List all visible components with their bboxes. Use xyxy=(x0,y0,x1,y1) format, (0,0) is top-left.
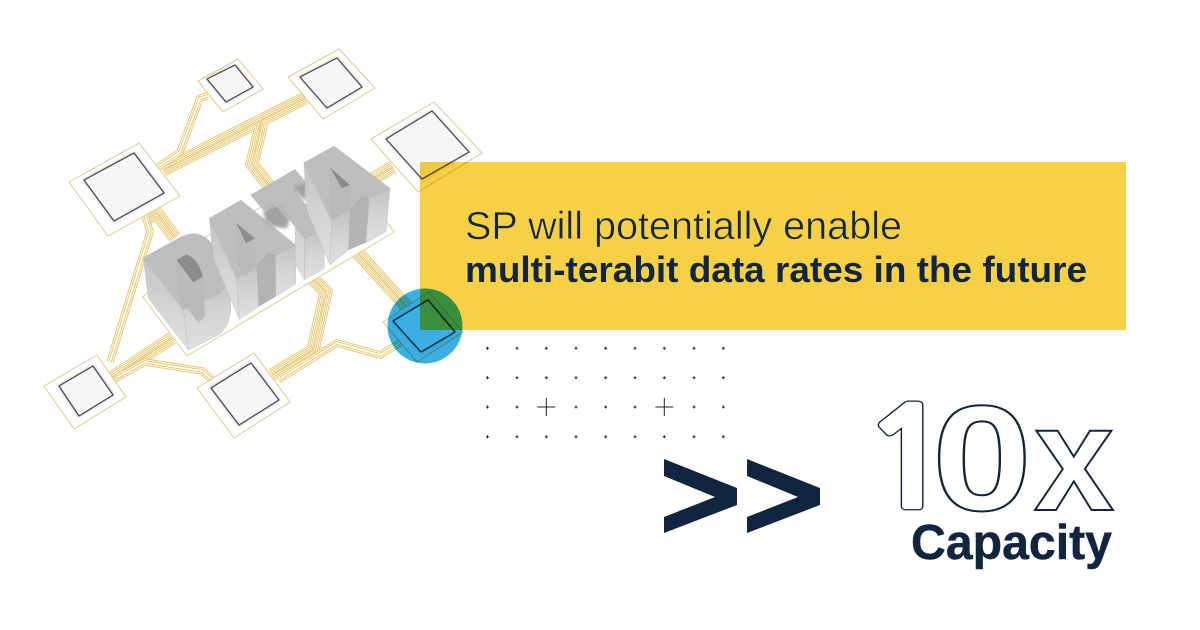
letter T xyxy=(251,169,324,280)
letter A xyxy=(209,200,296,319)
outlined 10x: x xyxy=(1034,374,1114,542)
outlined 10x xyxy=(860,374,1114,542)
yellow headline panel xyxy=(420,162,1126,330)
circuit traces xyxy=(110,96,407,380)
capacity label: Capacity xyxy=(911,516,1112,570)
platform under 3D word xyxy=(143,170,394,356)
outlined 10x: 1 xyxy=(860,392,957,528)
letter A second xyxy=(304,146,390,265)
chip: top middle xyxy=(288,49,375,119)
chip: top small xyxy=(198,59,263,112)
double chevron arrow xyxy=(664,459,820,533)
headline text: SP will potentially enable xyxy=(465,205,902,248)
chip: lower middle xyxy=(197,353,290,438)
headline text: multi-terabit data rates in the future xyxy=(465,249,1087,290)
3D word DATA xyxy=(143,146,390,350)
chip: upper right xyxy=(371,102,482,192)
outlined 10x: 0 xyxy=(932,374,1032,542)
letter D xyxy=(143,234,231,350)
headline text xyxy=(465,205,1087,290)
outlined 10x: 1 xyxy=(860,392,957,528)
dot grid with crosses xyxy=(486,347,725,438)
chip: lower left xyxy=(44,355,126,429)
blue circle highlight xyxy=(388,288,462,364)
chip: highlighted by blue circle xyxy=(383,292,463,362)
chip: upper left large xyxy=(69,143,180,236)
